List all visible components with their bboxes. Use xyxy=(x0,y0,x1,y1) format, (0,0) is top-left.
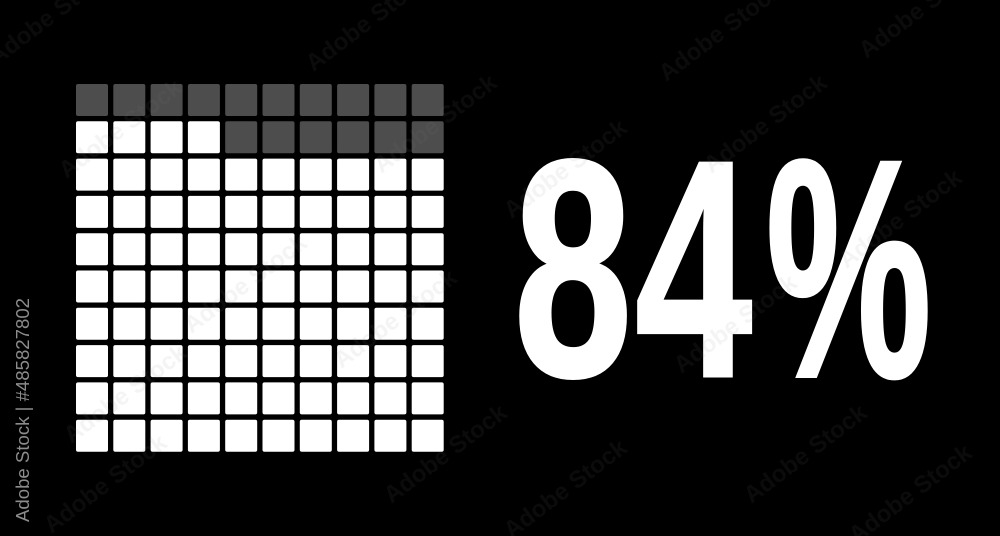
stock watermarks: Adobe Stock xyxy=(379,399,513,509)
stock watermarks: Adobe Stock xyxy=(54,74,188,184)
percentage figure: 84% xyxy=(514,96,931,443)
stock credit, vertical: Adobe Stock | #485827802 xyxy=(12,298,33,522)
stock watermarks: Adobe Stock xyxy=(179,229,313,339)
stock watermarks: Adobe Stock xyxy=(669,269,803,379)
stock watermarks: Adobe Stock xyxy=(739,399,873,509)
stock watermarks: Adobe Stock xyxy=(834,164,968,274)
waffle chart: 84 of 100 squares filled xyxy=(76,84,444,452)
percentage figure: 84%: % xyxy=(766,97,931,443)
stock watermarks: Adobe Stock xyxy=(499,114,633,224)
stock watermarks: Adobe Stock xyxy=(39,429,173,536)
stock watermarks: Adobe Stock xyxy=(699,69,833,179)
stock watermarks: Adobe Stock xyxy=(329,264,463,374)
stock watermarks: Adobe Stock xyxy=(369,69,503,179)
percentage figure: 84%: 4 xyxy=(635,97,754,443)
stock watermarks: Adobe Stock xyxy=(59,339,193,449)
percentage figure: 84%: 8 xyxy=(514,96,632,442)
